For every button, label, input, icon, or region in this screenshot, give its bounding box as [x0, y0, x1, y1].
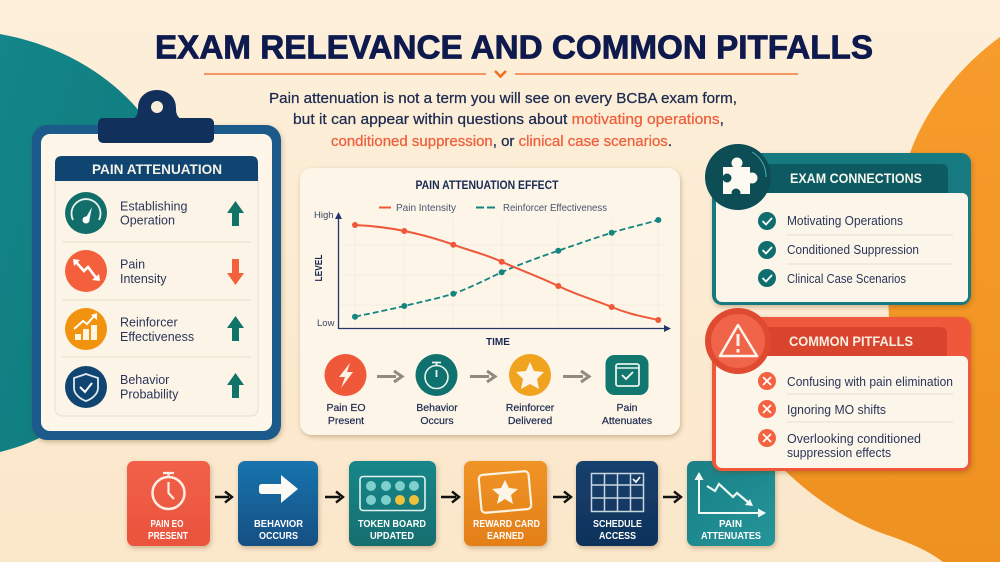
series: pain intensity [352, 222, 661, 323]
item: clinical case scenarios [758, 269, 906, 287]
chart axes: LEVEL [314, 254, 325, 282]
card: pain attenuates: ATTENUATES [701, 530, 761, 542]
arrow [553, 492, 571, 502]
flow step: behavior occurs [416, 354, 458, 427]
panel: common pitfalls [705, 308, 971, 471]
chart axes: High [314, 210, 334, 221]
card: token board updated: UPDATED [370, 530, 414, 542]
row: pain intensity: Intensity [120, 272, 167, 286]
item: confusing with pain elimination [758, 372, 953, 390]
chart legend: Pain Intensity [396, 202, 457, 214]
chart legend [379, 202, 607, 214]
flow step: pain EO present: Present [328, 415, 364, 427]
flow step: behavior occurs: Behavior [416, 402, 458, 414]
card: token board updated [349, 461, 436, 546]
intro text: but it can appear within questions about motivating operations , [293, 112, 724, 128]
heading: COMMON PITFALLS [789, 333, 913, 349]
flow step: behavior occurs: Occurs [420, 415, 454, 427]
card: schedule access: SCHEDULE [593, 518, 642, 530]
card: pain EO present [127, 461, 210, 546]
arrow [441, 492, 459, 502]
intro text: conditioned suppression , or clinical case scenarios . [331, 134, 672, 150]
clipboard clip [98, 90, 214, 143]
row: pain intensity [65, 250, 244, 292]
title divider with chevron [204, 71, 798, 76]
intro text [269, 91, 737, 150]
item: overlooking conditioned suppression effects: suppression effects [787, 446, 891, 460]
chart axes [314, 210, 671, 348]
item: overlooking conditioned suppression effects [758, 429, 921, 460]
row: establishing operation [65, 192, 244, 234]
series: reinforcer effectiveness [352, 217, 661, 320]
heading: EXAM CONNECTIONS [790, 170, 922, 186]
item: clinical case scenarios: Clinical Case Scenarios [787, 272, 906, 286]
item: motivating operations [758, 212, 903, 230]
flow arrow [377, 371, 402, 382]
row: establishing operation: Operation [120, 214, 175, 228]
card: pain EO present: PRESENT [148, 530, 188, 542]
item: ignoring MO shifts [758, 400, 886, 418]
title: EXAM RELEVANCE AND COMMON PITFALLS [155, 28, 873, 66]
row: establishing operation: Establishing [120, 200, 187, 214]
item: conditioned suppression: Conditioned Suppression [787, 243, 919, 257]
card: behavior occurs: OCCURS [259, 530, 298, 542]
flow arrow [563, 371, 589, 382]
flow step: pain EO present [324, 354, 366, 427]
row: reinforcer effectiveness: Reinforcer [120, 316, 178, 330]
card: behavior occurs: BEHAVIOR [254, 518, 303, 530]
flow step: pain attenuates [602, 355, 652, 427]
card: reward card earned: REWARD CARD [473, 518, 540, 530]
row: behavior probability [65, 366, 244, 408]
chart axes: Low [317, 318, 335, 329]
row: behavior probability: Probability [120, 388, 179, 402]
card: reward card earned: EARNED [487, 530, 524, 542]
card: schedule access [576, 461, 658, 546]
clipboard inner frame [55, 170, 258, 416]
panel: line chart and flow [300, 168, 680, 435]
flow step: reinforcer delivered [506, 354, 555, 427]
card: token board updated: TOKEN BOARD [358, 518, 426, 530]
row: reinforcer effectiveness: Effectiveness [120, 330, 194, 344]
chart axes: TIME [486, 337, 510, 348]
clipboard heading: PAIN ATTENUATION [92, 161, 222, 177]
item: confusing with pain elimination: Confusing with pain elimination [787, 375, 953, 389]
row: pain intensity: Pain [120, 258, 145, 272]
chart title: PAIN ATTENUATION EFFECT [416, 180, 558, 192]
item: motivating operations: Motivating Operations [787, 214, 903, 228]
panel: clipboard [32, 90, 281, 440]
card: behavior occurs [238, 461, 318, 546]
row: reinforcer effectiveness [65, 308, 244, 350]
icon: puzzle piece [705, 144, 771, 210]
flow step: reinforcer delivered: Delivered [508, 415, 552, 427]
flow arrow [470, 371, 495, 382]
flow step: reinforcer delivered: Reinforcer [506, 402, 555, 414]
flow step: pain attenuates: Attenuates [602, 415, 652, 427]
item: conditioned suppression [758, 241, 919, 259]
arrow [215, 492, 232, 502]
card: pain EO present: PAIN EO [150, 518, 184, 530]
card: schedule access: ACCESS [599, 530, 636, 542]
card: pain attenuates: PAIN [719, 518, 742, 530]
flow step: pain attenuates: Pain [616, 402, 638, 414]
arrow [663, 492, 681, 502]
icon: warning triangle [705, 308, 771, 374]
row: behavior probability: Behavior [120, 373, 169, 387]
card: reward card earned [464, 461, 547, 546]
heading [760, 327, 947, 356]
heading [760, 164, 948, 193]
chart legend: Reinforcer Effectiveness [503, 202, 607, 214]
panel: exam connections [705, 144, 971, 305]
clipboard heading [55, 156, 258, 181]
intro text: Pain attenuation is not a term you will see on every BCBA exam form, [269, 91, 737, 107]
flow step: pain EO present: Pain EO [326, 402, 366, 414]
arrow [325, 492, 343, 502]
item: ignoring MO shifts: Ignoring MO shifts [787, 403, 886, 417]
card: pain attenuates [687, 461, 775, 546]
item: overlooking conditioned suppression effects: Overlooking conditioned [787, 432, 921, 446]
